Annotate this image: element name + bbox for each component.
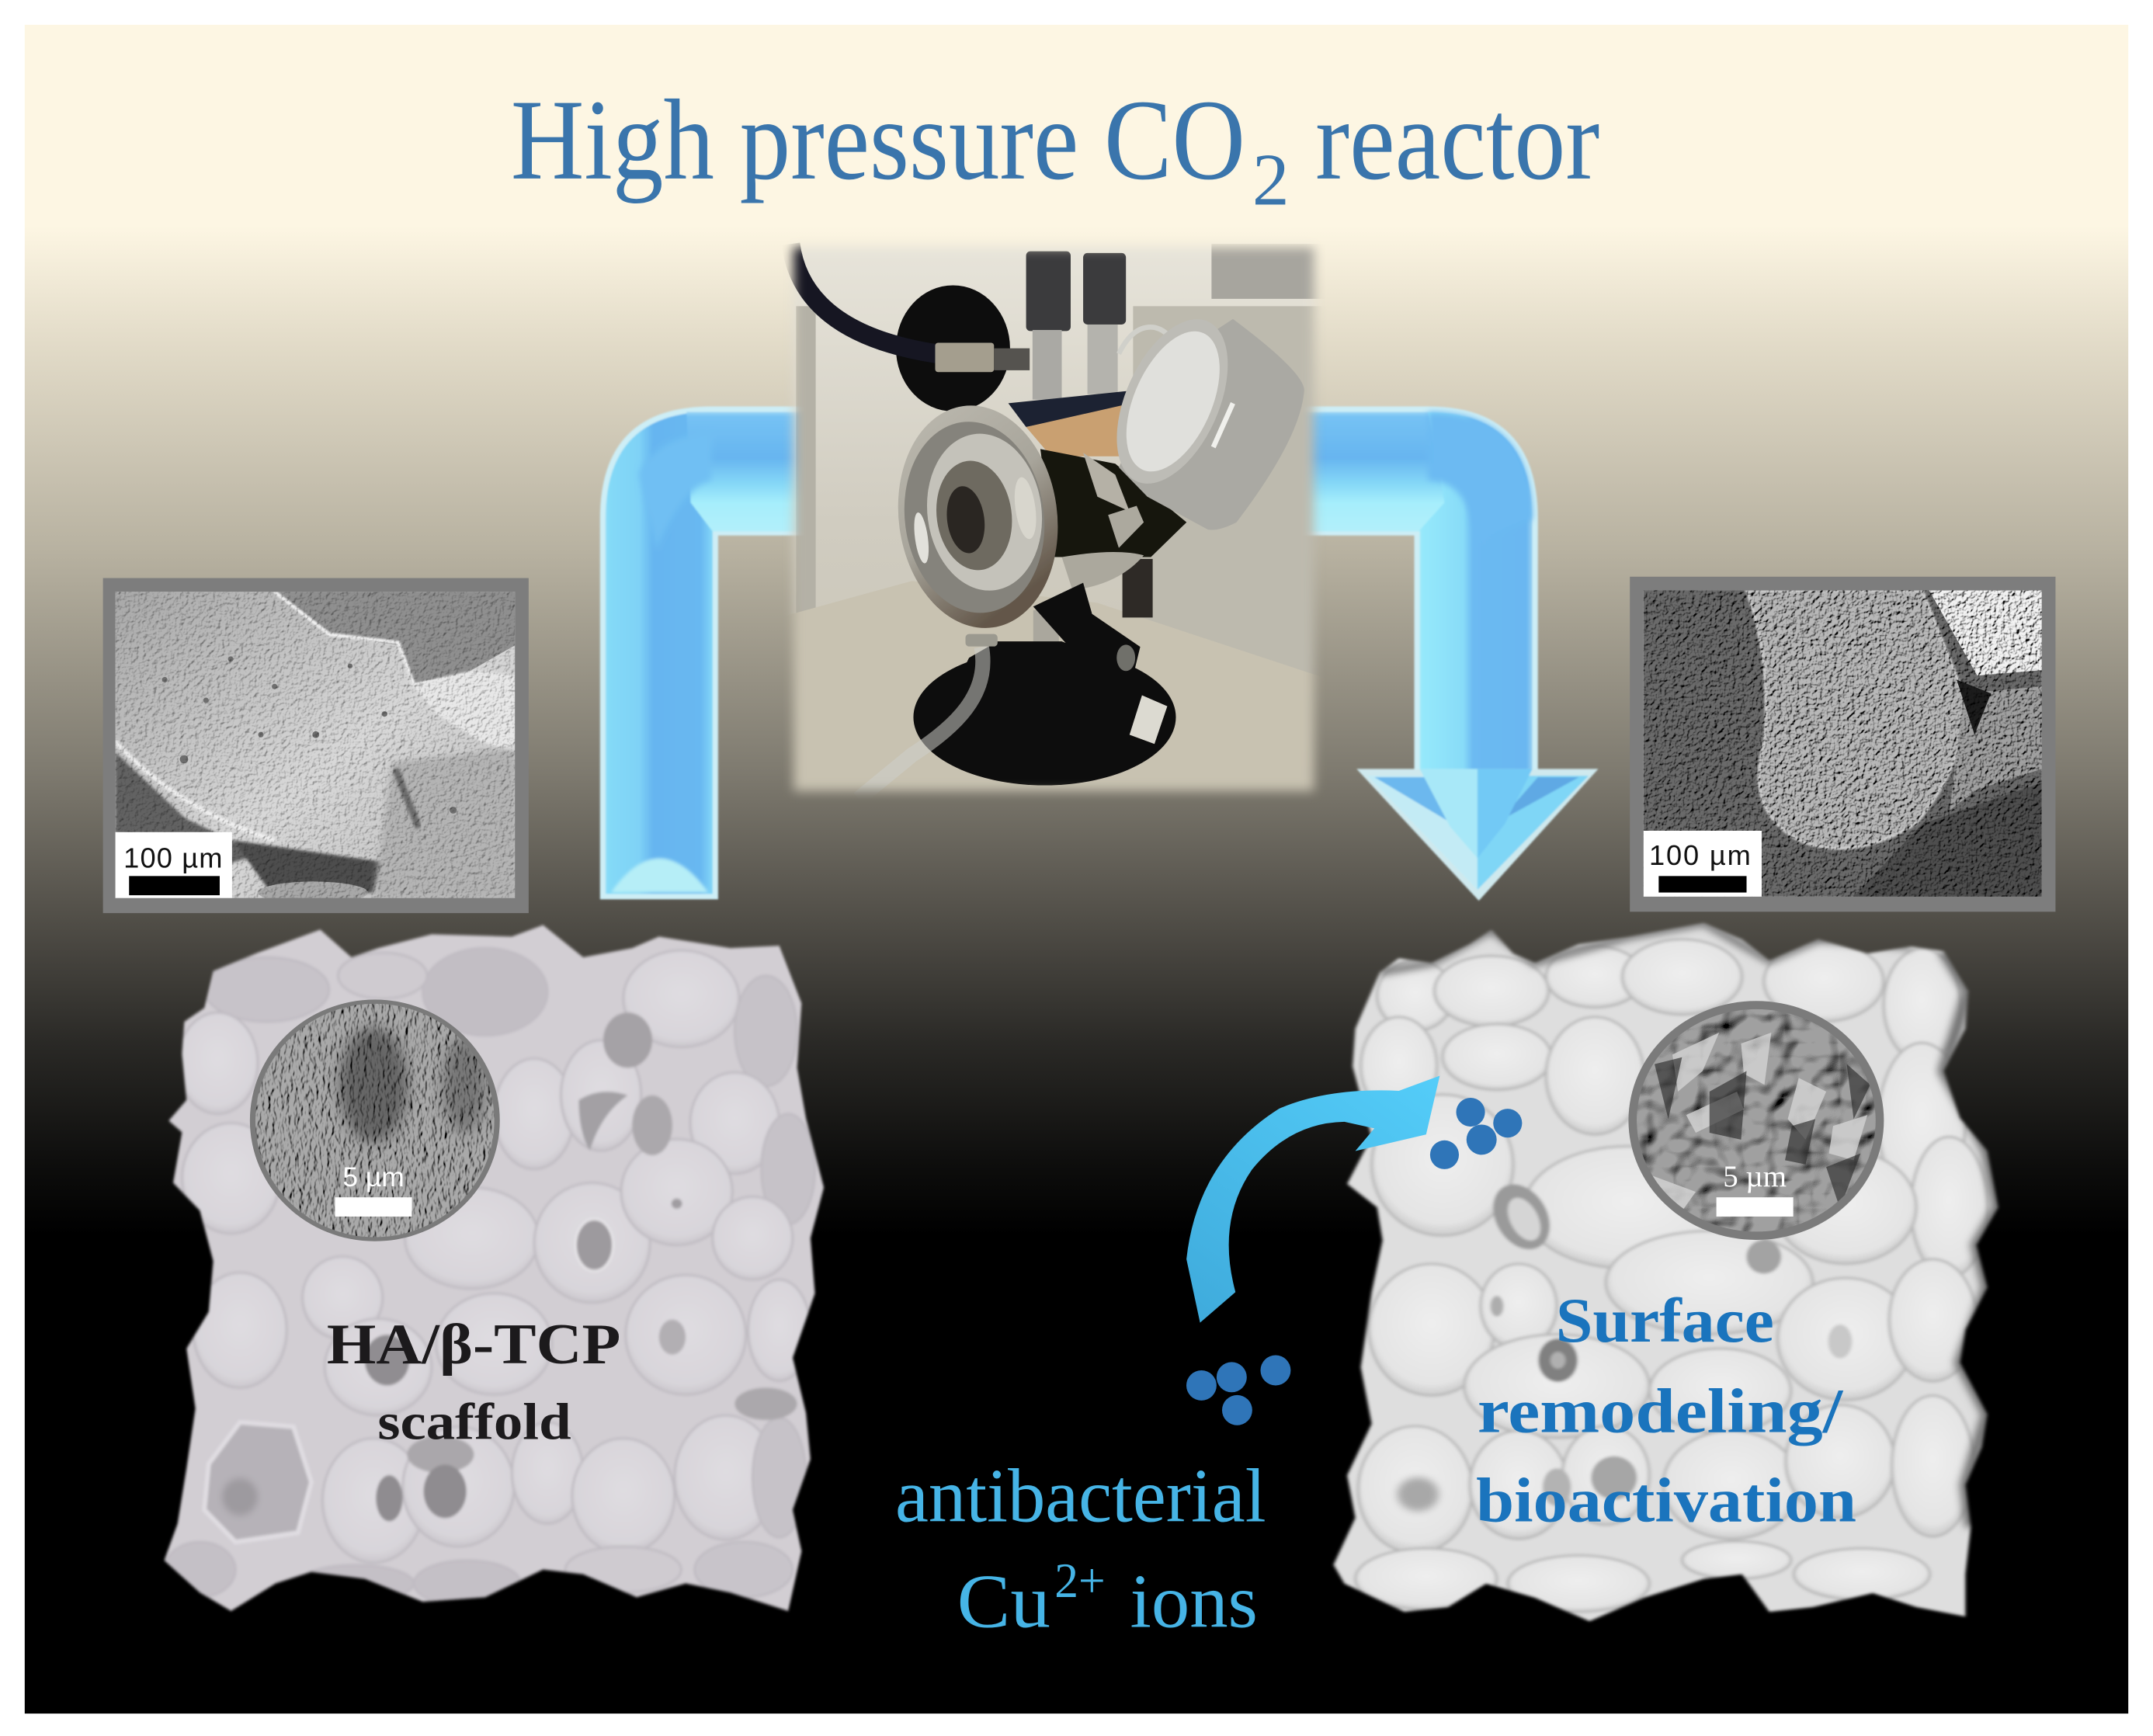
scaffold label: HA/β-TCP xyxy=(327,1313,620,1377)
photo clear tube xyxy=(859,647,983,799)
antibacterial label: antibacterial xyxy=(895,1454,1266,1539)
SEM top right bright zone xyxy=(1929,590,2042,675)
arrow head xyxy=(1356,769,1599,901)
title xyxy=(511,77,1599,221)
pores xyxy=(1398,1177,1852,1511)
SEM pits xyxy=(162,656,457,814)
surface label: bioactivation xyxy=(1476,1466,1856,1536)
SEM lower right dark xyxy=(1853,783,2042,897)
title: High pressure CO xyxy=(511,77,1245,204)
inset circle xyxy=(1627,1001,1888,1243)
photo walls xyxy=(786,247,1309,615)
arrow: right pipe descending from reactor xyxy=(1290,407,1538,776)
antibacterial label xyxy=(895,1454,1266,1644)
inset circle xyxy=(247,995,508,1249)
scale bar xyxy=(116,832,232,898)
surface label: remodeling/ xyxy=(1478,1377,1844,1446)
photo table xyxy=(797,581,1311,696)
photo gauge xyxy=(1119,319,1304,530)
antibacterial label: ions xyxy=(1130,1560,1258,1644)
right scaffold xyxy=(1165,916,2019,1653)
large hexagonal cell xyxy=(204,1422,311,1542)
photo stand xyxy=(1033,610,1059,641)
photo flange xyxy=(898,405,1057,628)
surface label xyxy=(1476,1286,1856,1536)
left SEM image xyxy=(103,578,529,913)
arrow: left pipe rising into reactor xyxy=(600,407,824,899)
SEM right ridge xyxy=(1950,686,2042,810)
photo hose and disc xyxy=(896,285,1010,411)
inset circle: 5 µm xyxy=(342,1162,405,1193)
photo vessel xyxy=(1009,391,1133,427)
SEM upper-right grain xyxy=(275,592,515,684)
SEM lower right grain xyxy=(373,748,515,898)
SEM white chunk xyxy=(412,670,515,752)
curved arrow xyxy=(1186,1076,1439,1323)
left scaffold xyxy=(155,916,854,1637)
inset circle: 5 µm xyxy=(1723,1160,1787,1193)
ions below arrow xyxy=(1186,1356,1290,1425)
reactor photo xyxy=(784,242,1321,798)
SEM lower left shadow xyxy=(115,752,248,865)
title: reactor xyxy=(1315,77,1599,204)
scaffold label: scaffold xyxy=(377,1392,571,1450)
scale bar: 100 µm xyxy=(123,842,222,874)
dark rim shading xyxy=(1943,951,1998,1527)
scaffold label xyxy=(327,1313,620,1450)
surface label: Surface xyxy=(1556,1286,1774,1356)
scale bar: 100 µm xyxy=(1649,839,1751,871)
antibacterial label: 2+ xyxy=(1054,1553,1106,1608)
photo connector xyxy=(935,343,994,372)
pores xyxy=(365,1012,797,1521)
scale bar xyxy=(1644,831,1762,897)
photo valves xyxy=(1026,252,1071,331)
antibacterial label: Cu xyxy=(957,1560,1050,1644)
foam cells xyxy=(164,948,815,1606)
title: 2 xyxy=(1252,139,1290,221)
right SEM image xyxy=(1630,577,2055,911)
ions entering scaffold xyxy=(1430,1098,1522,1169)
SEM bright central grain xyxy=(1747,590,1966,849)
foam cells xyxy=(1356,939,1987,1612)
